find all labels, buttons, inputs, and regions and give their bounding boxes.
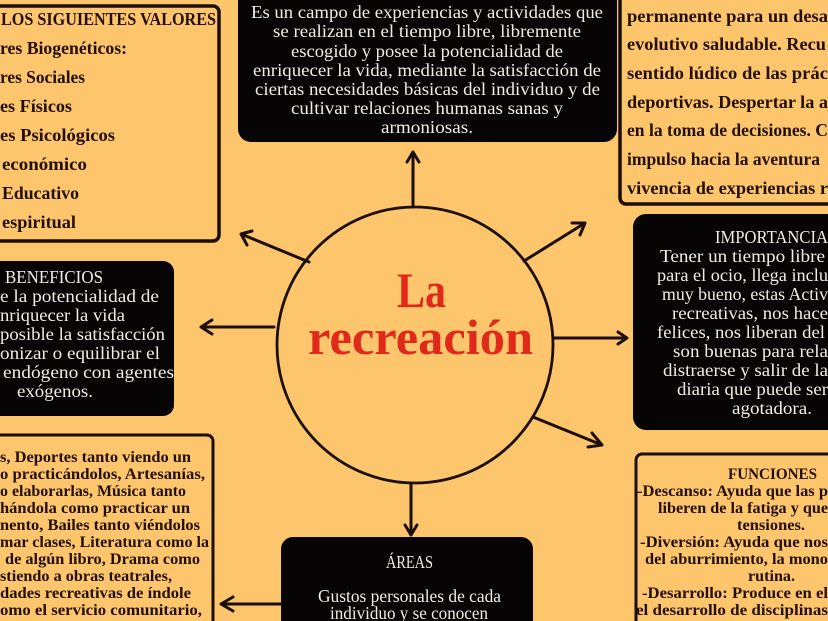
arrow: right to importance xyxy=(553,332,627,344)
panel: definition xyxy=(238,0,617,142)
panel: values: es Psicológicos xyxy=(0,125,115,145)
panel: objectives: sentido lúdico de las prác xyxy=(627,63,828,83)
arrow: down to areas xyxy=(405,484,417,535)
arrow: left to activities xyxy=(221,597,281,611)
panel: activities: stiendo a obras teatrales, xyxy=(0,568,172,585)
panel: values: res Sociales xyxy=(0,67,85,87)
panel: values: res Biogenéticos: xyxy=(0,38,127,58)
panel: objectives: deportivas. Despertar la a xyxy=(627,92,828,112)
panel: functions: -Desarrollo: Produce en el xyxy=(642,585,828,602)
panel: activities xyxy=(0,435,213,621)
panel: definition: se realizan en el tiempo libre, libremente xyxy=(273,21,581,41)
arrow: up-left to values xyxy=(241,231,309,262)
panel: definition: escogido y posee la potencialidad de xyxy=(291,41,563,61)
panel: benefits xyxy=(0,261,174,416)
panel: importance: Tener un tiempo libre xyxy=(660,246,825,266)
panel: benefits: e la potencialidad de xyxy=(0,286,159,306)
panel: objectives: permanente para un desa xyxy=(627,6,828,26)
panel: activities: hándola como practicar un xyxy=(0,500,190,517)
panel: functions: -Descanso: Ayuda que las p xyxy=(637,483,828,500)
panel: values xyxy=(0,6,219,241)
arrow: left to benefits xyxy=(201,320,274,334)
panel: importance: distraerse y salir de la xyxy=(663,360,828,380)
panel: activities: nento, Bailes tanto viéndolos xyxy=(0,517,200,534)
panel: importance: recreativas, nos hace xyxy=(672,303,828,323)
panel: activities: s, Deportes tanto viendo un xyxy=(0,449,191,466)
panel: functions: rutina. xyxy=(748,568,795,585)
panel: objectives xyxy=(620,0,828,204)
panel: values: Educativo xyxy=(2,183,79,203)
panel: benefits: endógeno con agentes xyxy=(3,362,174,382)
panel: importance: diaria que puede ser xyxy=(677,379,828,399)
panel: areas xyxy=(281,537,533,621)
arrow: down-right to functions xyxy=(533,417,602,447)
title: La xyxy=(397,262,446,318)
panel: objectives: impulso hacia la aventura xyxy=(627,149,820,169)
panel: activities: omo el servicio comunitario, xyxy=(0,602,202,619)
panel: benefits: exógenos. xyxy=(17,381,93,401)
title xyxy=(308,262,533,365)
panel: functions: liberen de la fatiga y que xyxy=(658,500,828,517)
arrow: up to definition xyxy=(407,152,419,207)
panel: functions: tensiones. xyxy=(737,517,805,534)
panel: importance: para el ocio, llega inclu xyxy=(657,265,828,285)
panel: importance: agotadora. xyxy=(732,398,812,418)
heading: values: LOS SIGUIENTES VALORES xyxy=(1,9,216,29)
panel: definition: armoniosas. xyxy=(381,117,473,137)
panel: importance: felices, nos liberan del xyxy=(657,322,825,342)
panel: functions xyxy=(636,454,828,621)
panel: activities: o practicándolos, Artesanías, xyxy=(0,466,205,483)
panel: functions: el desarrollo de disciplinas xyxy=(636,602,828,619)
panel: definition: ciertas necesidades básicas del individuo y de xyxy=(255,79,600,99)
panel: benefits: onizar o equilibrar el xyxy=(0,343,160,363)
panel: benefits: posible la satisfacción xyxy=(0,324,165,344)
panel: areas: Gustos personales de cada xyxy=(318,586,501,606)
panel: importance: son buenas para rela xyxy=(673,341,828,361)
panel: activities: mar clases, Literatura como la xyxy=(0,534,209,551)
heading: benefits: BENEFICIOS xyxy=(5,267,103,287)
panel: functions: del aburrimiento, la mono xyxy=(645,551,828,568)
panel: activities: dades recreativas de índole xyxy=(0,585,191,602)
panel: values: económico xyxy=(2,154,87,174)
panel: objectives: evolutivo saludable. Recu xyxy=(627,34,826,54)
panel: definition: enriquecer la vida, mediante la satisfacción de xyxy=(253,60,601,80)
panel: values: es Físicos xyxy=(0,96,72,116)
central circle xyxy=(277,207,553,483)
panel: activities: de algún libro, Drama como xyxy=(5,551,200,568)
heading: functions: FUNCIONES xyxy=(728,466,817,483)
panel: objectives: en la toma de decisiones. C xyxy=(627,120,828,140)
panel: definition: Es un campo de experiencias y actividades que xyxy=(251,2,603,22)
panel: benefits: nriquecer la vida xyxy=(0,305,125,325)
title: recreación xyxy=(308,309,533,365)
panel: values: espiritual xyxy=(2,212,76,232)
heading: areas: ÁREAS xyxy=(386,552,433,572)
panel: definition: cultivar relaciones humanas sanas y xyxy=(291,98,563,118)
panel: importance: muy bueno, estas Activ xyxy=(662,284,828,304)
panel: objectives: vivencia de experiencias r xyxy=(627,178,828,198)
panel: functions: -Diversión: Ayuda que nos xyxy=(640,534,828,551)
panel: activities: o elaborarlas, Música tanto xyxy=(0,483,186,500)
panel: importance xyxy=(633,214,828,430)
arrow: up-right to objectives xyxy=(524,223,585,261)
